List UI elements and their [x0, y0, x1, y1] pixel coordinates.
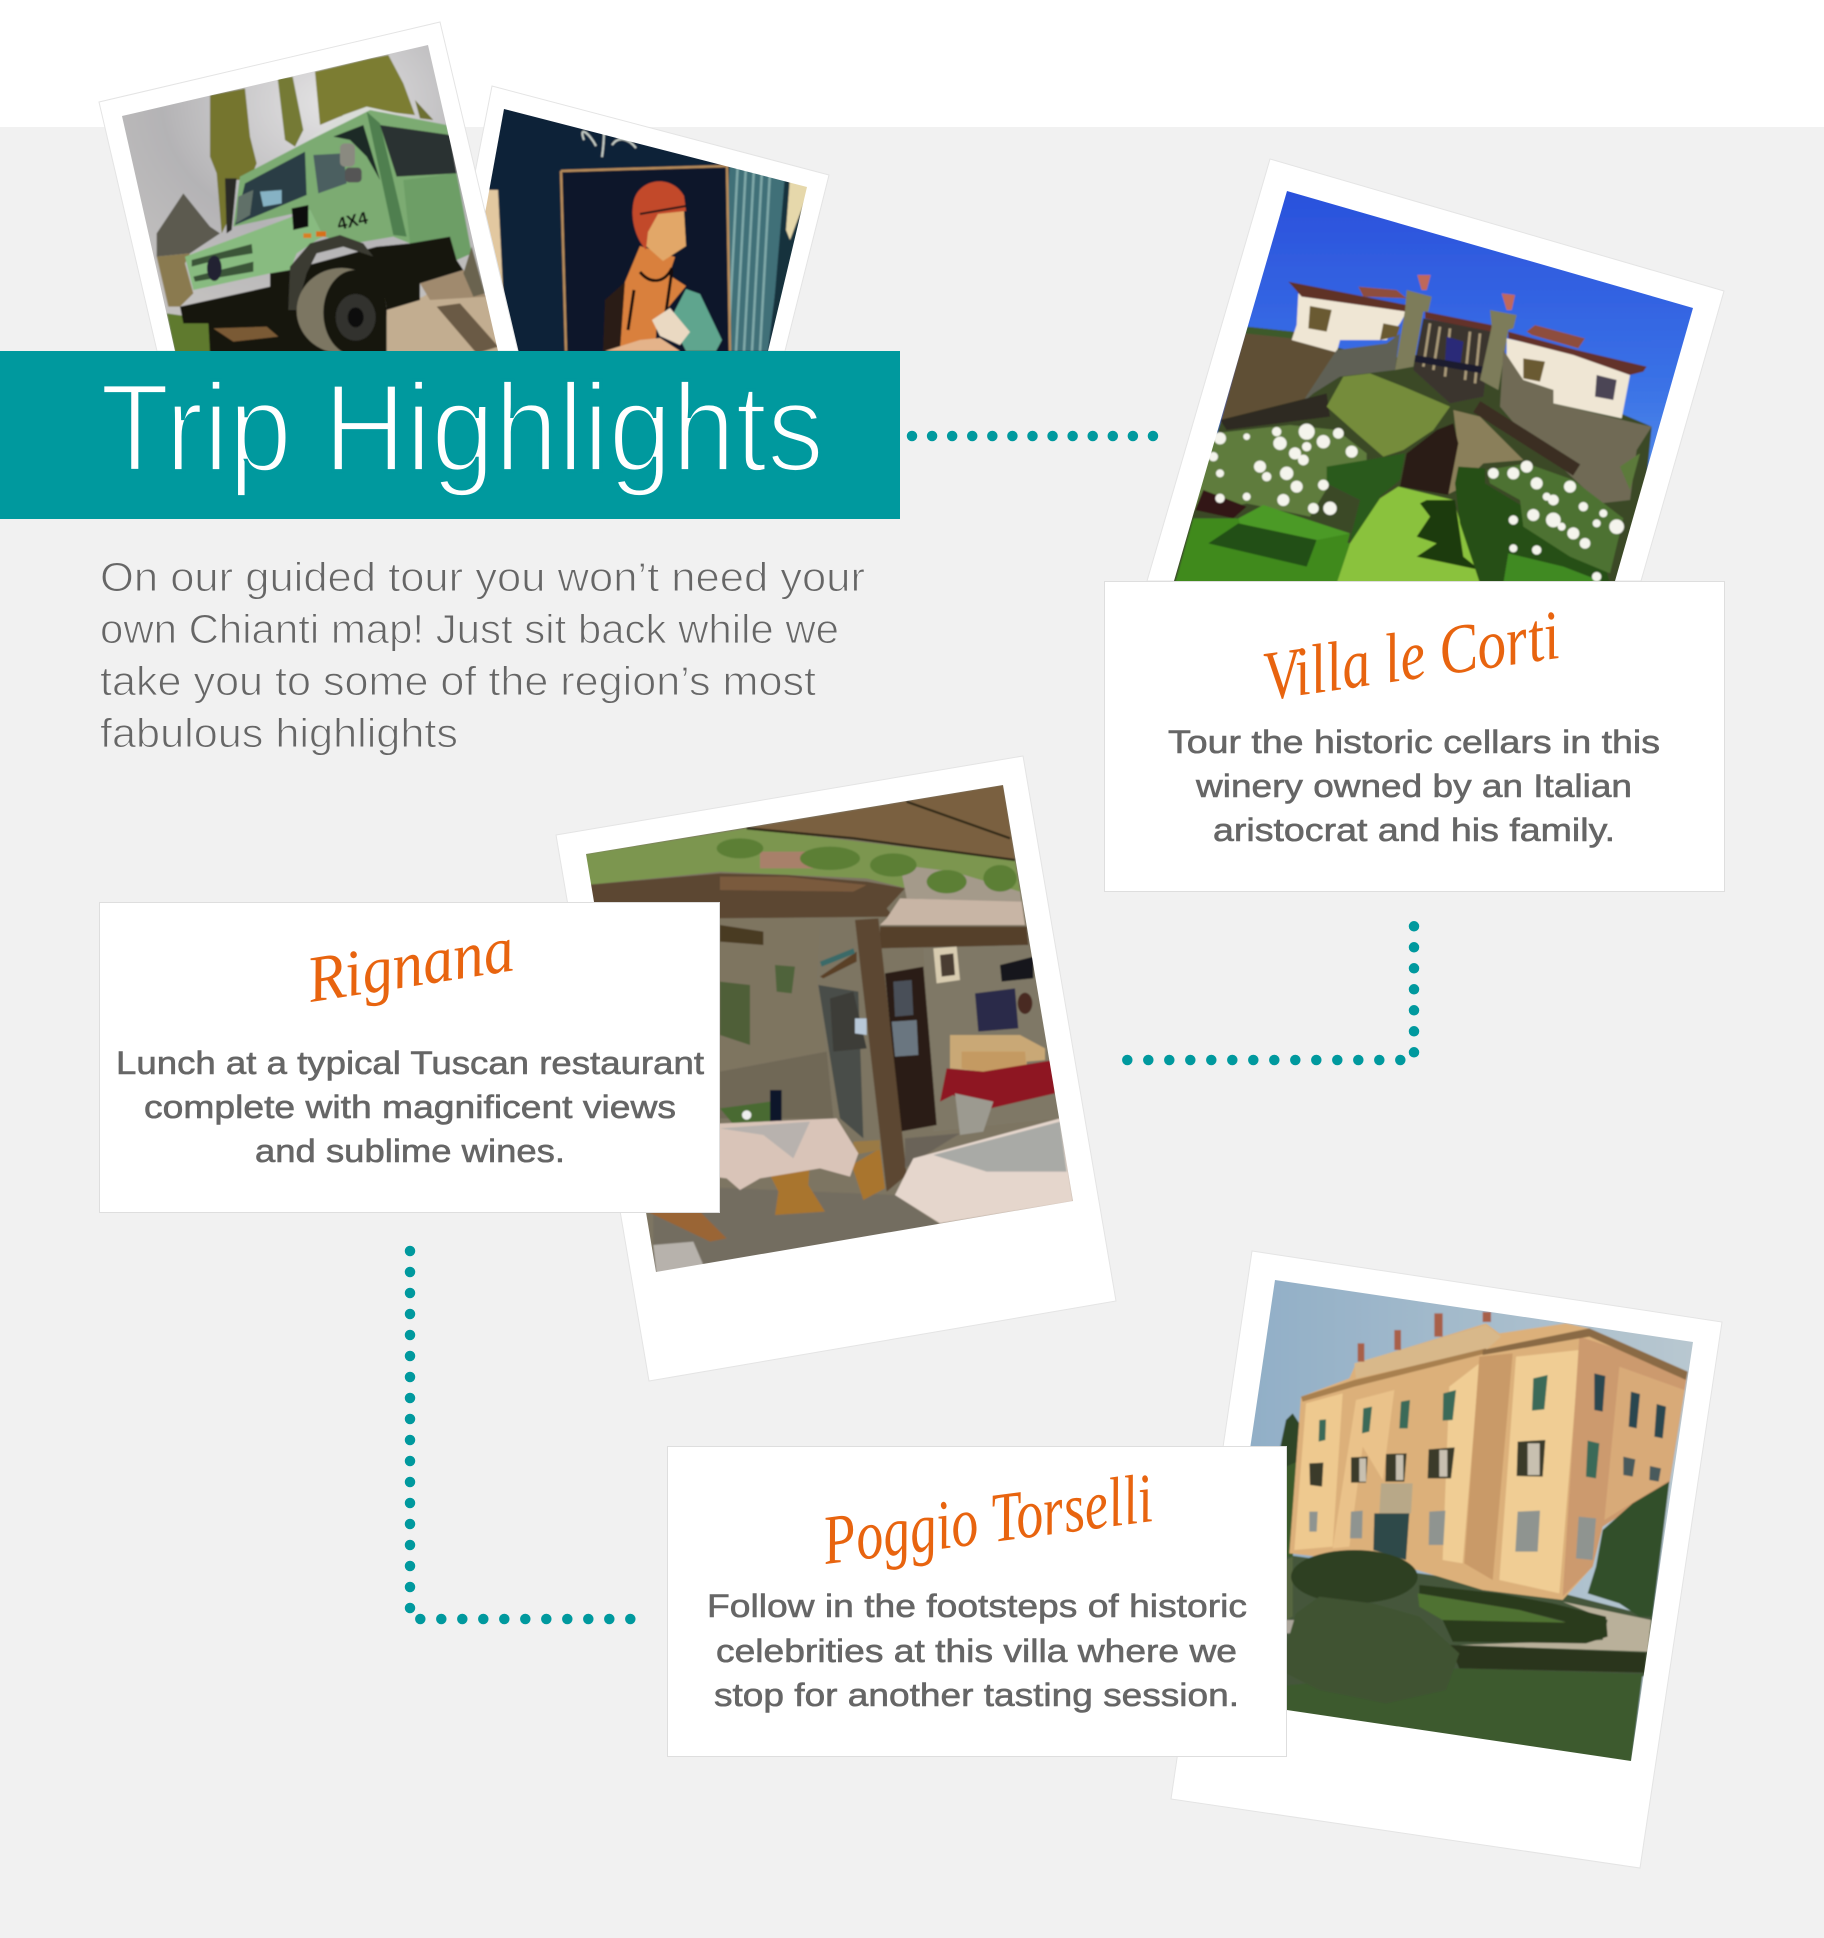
card: Rignana [100, 902, 720, 1212]
heading: Rignana: Rignana [301, 913, 519, 1017]
description: Villa le Corti [1168, 724, 1660, 848]
title: Trip Highlights [100, 359, 824, 498]
intro paragraph: take you to some of the region’s most [100, 658, 817, 704]
intro paragraph [100, 554, 865, 756]
dotted connector: Rignana to Poggio Torselli [410, 1251, 631, 1619]
photo: green 4x4 truck: 4X4 [335, 207, 370, 234]
photo: wine label portrait [476, 86, 830, 351]
description: Rignana: and sublime wines. [255, 1133, 565, 1169]
description: Poggio Torselli [707, 1588, 1247, 1713]
title banner [0, 351, 900, 519]
description: Rignana [116, 1045, 704, 1169]
intro paragraph: own Chianti map! Just sit back while we [100, 606, 839, 652]
card: Poggio Torselli [668, 1446, 1286, 1756]
description: Poggio Torselli: stop for another tasting session. [714, 1677, 1239, 1713]
heading: Villa le Corti: Villa le Corti [1258, 597, 1564, 716]
dotted connector: title to Villa le Corti [912, 431, 1153, 441]
description: Poggio Torselli: Follow in the footsteps of historic [707, 1588, 1247, 1624]
card: Villa le Corti [1104, 582, 1724, 892]
intro paragraph: On our guided tour you won’t need your [100, 554, 865, 600]
description: Villa le Corti: Tour the historic cellars in this [1168, 724, 1660, 760]
photo: Rignana [556, 756, 1116, 1381]
description: Villa le Corti: aristocrat and his family. [1213, 812, 1615, 848]
photo: green 4x4 truck [99, 22, 518, 355]
photo: Villa le Corti [1147, 159, 1724, 583]
photo: Poggio Torselli [1171, 1251, 1722, 1868]
description: Rignana: Lunch at a typical Tuscan restaurant [116, 1045, 704, 1081]
heading: Poggio Torselli: Poggio Torselli [817, 1460, 1157, 1580]
dotted connector: Villa le Corti to Rignana [1127, 926, 1414, 1060]
description: Rignana: complete with magnificent views [144, 1089, 676, 1125]
description: Poggio Torselli: celebrities at this villa where we [716, 1633, 1237, 1669]
intro paragraph: fabulous highlights [100, 710, 458, 756]
description: Villa le Corti: winery owned by an Italian [1195, 768, 1632, 804]
